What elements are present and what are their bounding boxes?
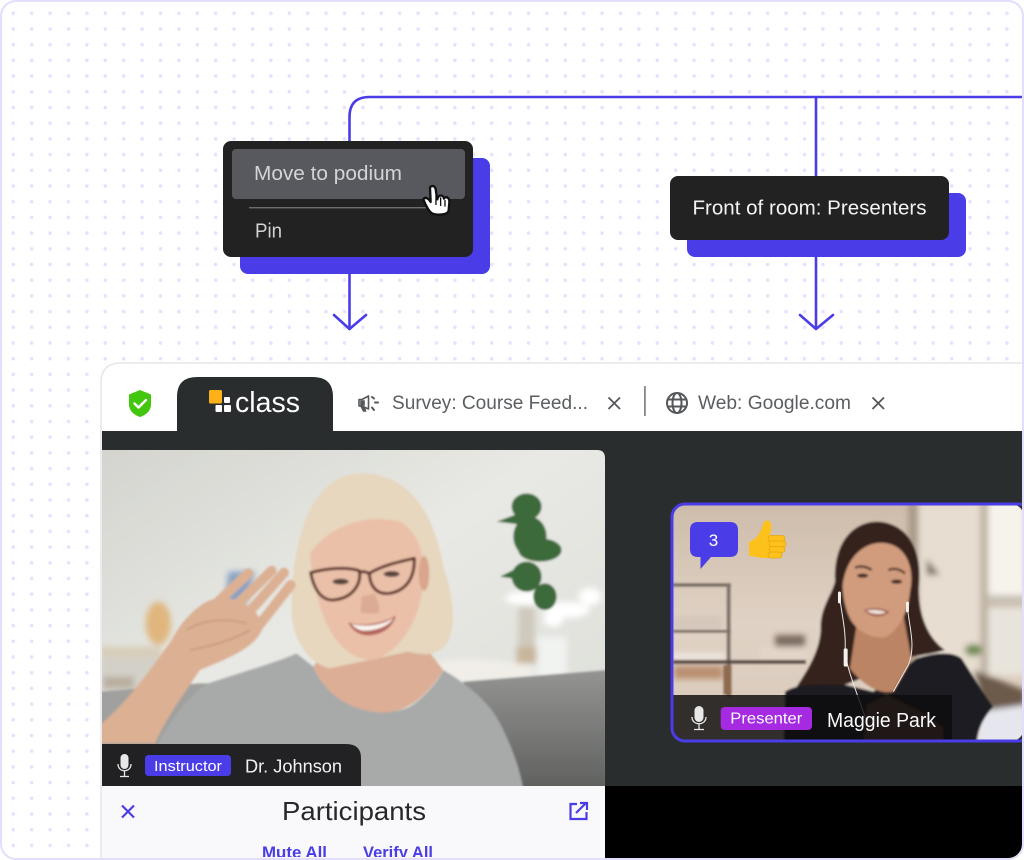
actions: mute and verify <box>263 846 432 857</box>
badge: Presenter <box>721 707 812 730</box>
icon: security shield <box>129 390 151 417</box>
smile <box>348 616 396 635</box>
tab: survey: Survey: Course Feed... <box>392 393 588 414</box>
name bar: Dr. Johnson <box>102 744 361 786</box>
glasses <box>311 558 414 600</box>
name bar: Dr. Johnson: Dr. Johnson <box>245 756 342 776</box>
icon: open external <box>570 803 587 819</box>
hair <box>292 473 453 668</box>
app window <box>97 363 1024 860</box>
hair <box>793 522 945 693</box>
earphone wires <box>839 592 912 722</box>
shirt <box>783 653 993 748</box>
participants panel <box>102 801 605 858</box>
badge: Instructor: Instructor <box>154 758 222 775</box>
presenter frame <box>672 504 1024 741</box>
icon: microphone <box>692 706 706 730</box>
heading: Participants: Participants <box>282 796 426 826</box>
tab: web: Web: Google.com <box>698 393 851 414</box>
badge: Instructor <box>145 755 231 776</box>
icon: hand cursor <box>423 186 449 215</box>
brows and eyes <box>855 566 905 573</box>
context menu card <box>223 141 490 274</box>
icon: microphone <box>118 754 131 776</box>
active tab: class logo: class <box>235 387 300 419</box>
menu item: Move to podium: Move to podium <box>254 163 402 185</box>
callout: Front of room: Front of room: Presenters <box>692 198 926 220</box>
plant <box>497 493 562 610</box>
tab: web <box>667 393 884 414</box>
face <box>310 519 424 660</box>
presenter video: woman with earphones <box>667 498 1024 748</box>
name bar: Maggie Park <box>672 695 952 741</box>
icon: thumbs up <box>749 520 786 558</box>
arm and hand <box>218 571 291 628</box>
icon: close <box>122 806 134 818</box>
neck <box>850 615 912 692</box>
connector line: top rail with left and middle arrows <box>334 97 1024 330</box>
shirt <box>150 653 523 790</box>
active tab: class logo <box>177 377 333 431</box>
eyes <box>333 579 349 585</box>
menu item: Pin: Pin <box>255 220 282 242</box>
reaction: message bubble count <box>690 522 738 569</box>
reaction: message bubble count: 3 <box>709 531 718 550</box>
callout: Front of room <box>670 176 966 257</box>
neck <box>312 650 444 714</box>
name bar: Maggie Park: Maggie Park <box>827 710 937 732</box>
hands <box>864 694 944 740</box>
badge: Presenter: Presenter <box>730 710 803 728</box>
face <box>843 543 911 637</box>
instructor video: woman waving <box>97 447 610 790</box>
